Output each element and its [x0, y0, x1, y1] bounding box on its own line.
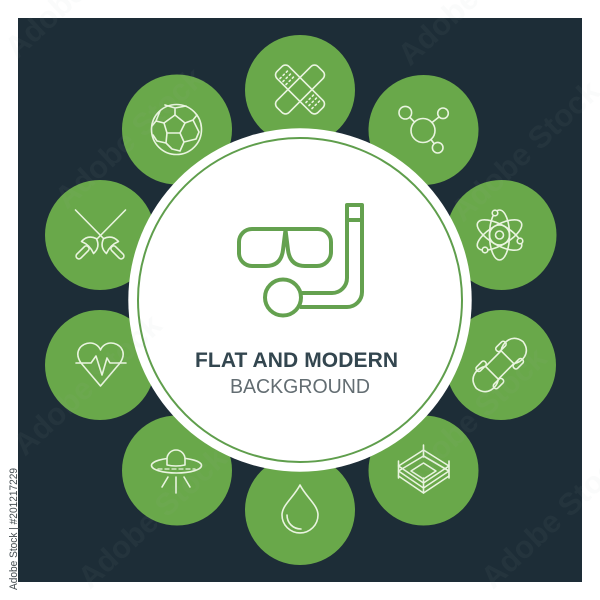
- watermarks: Adobe Stock: [71, 440, 234, 595]
- watermarks: Adobe Stock: [6, 307, 169, 462]
- subheading: BACKGROUND: [230, 376, 370, 398]
- panel: bandage badge: [245, 35, 355, 145]
- stock id caption: Adobe Stock | #201217229: [8, 468, 20, 590]
- panel: soccer ball badge: [122, 74, 232, 184]
- panel: ufo badge: [122, 416, 232, 526]
- panel: boxing ring badge: [368, 416, 478, 526]
- central white circle: [128, 128, 472, 472]
- heading: FLAT AND MODERN: [195, 349, 398, 372]
- central green ring: [138, 138, 462, 462]
- panel: atom badge: [446, 180, 556, 290]
- panel: skateboard badge: [446, 310, 556, 420]
- watermarks: Adobe Stock: [48, 60, 211, 215]
- watermarks: Adobe Stock: [391, 340, 554, 495]
- icon: snorkel and mask: [239, 205, 362, 316]
- panel: molecule badge: [368, 75, 478, 185]
- panel: water drop badge: [245, 455, 355, 565]
- panel: fencing swords badge: [45, 180, 155, 290]
- panel: heartbeat badge: [45, 310, 155, 420]
